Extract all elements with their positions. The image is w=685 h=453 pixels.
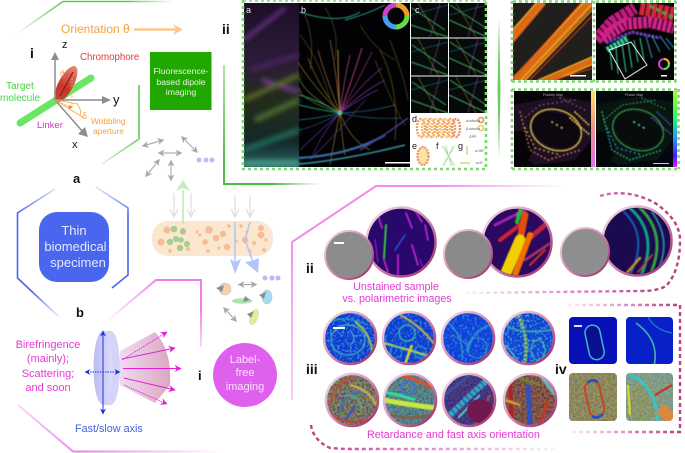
image panel: microtubule aster a/b: b	[301, 5, 306, 15]
image panel: phase map	[588, 91, 677, 167]
heading: orientation arrow	[61, 22, 183, 36]
image panel: phase map: Phase Map	[625, 93, 643, 97]
image: orientation circle 1	[326, 374, 378, 426]
frame: specimen hexagon	[18, 187, 128, 317]
caption: retardance and fast axis orientation: Retardance and fast axis orientation	[367, 429, 540, 441]
icon: blue dots bottom	[262, 276, 280, 280]
divider wedge	[498, 18, 500, 158]
phase colorbar	[673, 91, 677, 167]
scale bar	[385, 162, 410, 164]
birefringence diagram: (mainly);	[27, 353, 69, 365]
panel: dipole diagram i: z	[62, 39, 68, 51]
panel: dipole diagram i: i	[30, 45, 34, 61]
image panel: polarity map: Polarity Map	[543, 93, 563, 97]
birefringence diagram: Scattering;	[22, 368, 74, 380]
illustration: d-g microtubule structure: g	[458, 141, 463, 151]
image panel: microtubule aster a/b	[244, 3, 410, 167]
label: iv: iv	[555, 361, 567, 377]
label: i label-free: i	[198, 368, 202, 383]
label: b: b	[76, 305, 84, 320]
label: a: a	[73, 171, 81, 186]
incoming arrows	[170, 193, 254, 217]
panel: dipole diagram i: Chromophore	[80, 52, 139, 63]
image: unstained vs polarimetric pair 2	[444, 208, 555, 278]
color wheel	[385, 5, 407, 27]
illustration: d-g microtubule structure: GFP	[469, 135, 477, 139]
axes	[51, 52, 111, 137]
circle: label-free imaging	[213, 343, 277, 407]
panel: dipole diagram i: aperture	[93, 126, 124, 136]
circle: label-free imaging: imaging	[226, 381, 264, 393]
box: thin biomedical specimen: specimen	[50, 255, 106, 270]
image: retardance circle 2	[383, 312, 435, 365]
image panel: orange filaments	[513, 3, 592, 80]
icon: scattered particles	[216, 283, 272, 326]
box: fluorescence-based dipole imaging: Fluorescence-	[153, 66, 209, 76]
illustration: d-g microtubule structure: β-tubulin	[466, 127, 480, 131]
specimen band illustration	[152, 180, 273, 274]
image: iv orientation tissue 1	[569, 373, 617, 421]
image: orientation circle 2	[384, 374, 436, 426]
panel: dipole diagram i: Linker	[37, 120, 63, 131]
illustration: d-g microtubule structure: f	[436, 141, 439, 151]
heading: orientation arrow: Orientation θ	[61, 22, 130, 36]
image: orientation circle 3	[443, 374, 495, 426]
panel: dipole diagram i: δ	[82, 111, 87, 121]
birefringence diagram: and soon	[25, 382, 71, 394]
illustration: d-g microtubule structure: α-tubulin	[466, 119, 480, 123]
image panel: c time series	[411, 3, 487, 113]
panel: dipole diagram i: y	[113, 92, 120, 107]
image: iv orientation tissue 2	[626, 373, 673, 422]
dashed frame: pair images	[463, 193, 680, 293]
dashed frame: fluorescence images	[243, 0, 486, 169]
panel: dipole diagram i: Wobbling	[91, 116, 126, 126]
box: thin biomedical specimen: Thin	[61, 223, 87, 238]
image: retardance circle 3	[442, 312, 494, 364]
illustration: d-g microtubule structure: α=90°	[475, 149, 485, 153]
illustration: d-g microtubule structure: α=0°	[476, 161, 484, 165]
image: unstained vs polarimetric pair 3	[561, 206, 672, 278]
circle: label-free imaging: free	[236, 367, 254, 379]
polarity colorbar	[591, 91, 595, 167]
panel: dipole diagram i: θ	[60, 69, 65, 78]
frame: fluorescence section outlines	[15, 2, 320, 184]
panel a	[244, 3, 299, 167]
green emission arrow	[182, 190, 184, 224]
circle: label-free imaging: Label-	[230, 354, 261, 366]
illustration: d-g microtubule structure: e	[412, 141, 417, 151]
molecule rod	[20, 78, 91, 123]
label: iii: iii	[306, 361, 318, 377]
image: unstained vs polarimetric pair 1	[325, 208, 436, 280]
birefringence diagram: Fast/slow axis	[75, 423, 143, 435]
box: thin biomedical specimen: biomedical	[44, 239, 107, 254]
box: fluorescence-based dipole imaging: imaging	[166, 87, 196, 97]
panel: dipole diagram i	[0, 39, 139, 151]
birefringence diagram	[16, 331, 181, 435]
dashed frame: iv	[568, 305, 680, 432]
dashed frame: retardance	[311, 425, 557, 449]
icon: blue dots top	[196, 158, 214, 162]
image: iv retardance tissue 2	[626, 317, 673, 366]
dashed frame: right panels	[512, 1, 678, 169]
chromophore ellipse	[50, 63, 82, 105]
image: retardance circle 4	[502, 312, 554, 365]
frame: label-free outlines	[18, 186, 565, 452]
image: orientation circle 4	[504, 374, 556, 426]
image panel: orientation-colored cell edge	[596, 3, 674, 80]
illustration: d-g microtubule structure	[412, 114, 485, 166]
panel: dipole diagram i: molecule	[0, 93, 40, 104]
caption: unstained sample: vs. polarimetric images	[342, 293, 452, 305]
image: retardance circle 1	[324, 312, 376, 365]
label: ii fluorescence: ii	[222, 21, 230, 37]
blue transmitted arrows	[234, 222, 236, 262]
image panel: polarity map	[506, 91, 595, 167]
box: thin biomedical specimen	[39, 212, 109, 282]
panel: dipole diagram i: x	[72, 139, 78, 151]
label: ii label-free: ii	[306, 260, 314, 276]
panel b strokes	[298, 5, 408, 165]
image: iv retardance tissue 1	[569, 317, 617, 364]
birefringence diagram: Birefringence	[16, 339, 80, 351]
box: fluorescence-based dipole imaging: based dipole	[156, 77, 206, 87]
caption: unstained sample: Unstained sample	[353, 281, 439, 293]
icon: gray emitted polarization arrows	[143, 137, 197, 180]
box: fluorescence-based dipole imaging	[150, 52, 212, 110]
image panel: c time series: c	[415, 5, 420, 15]
panel: dipole diagram i: Target	[6, 81, 34, 92]
illustration: d-g microtubule structure: d	[412, 114, 417, 124]
image panel: microtubule aster a/b: a	[246, 5, 251, 15]
